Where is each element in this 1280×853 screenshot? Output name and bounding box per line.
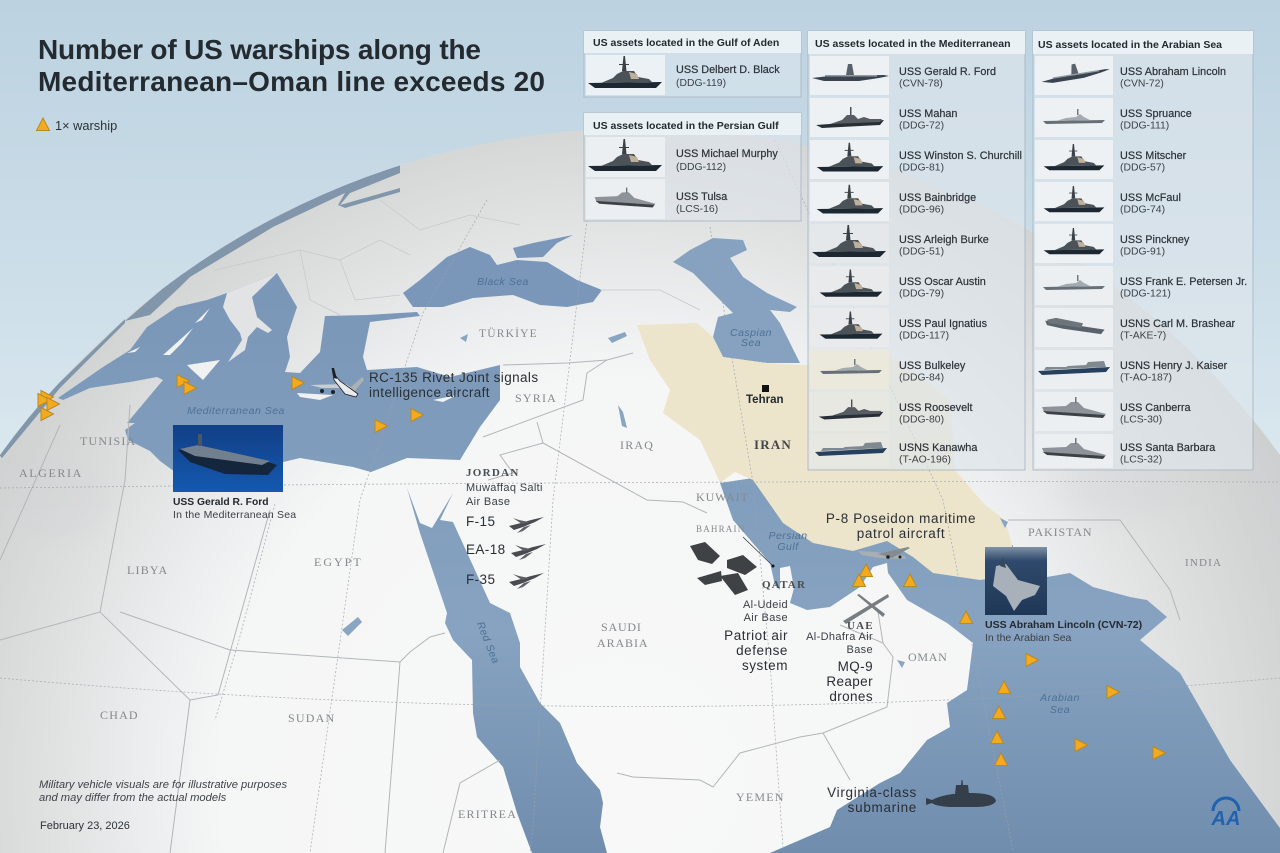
asset: USS Mitscher: (DDG-57) bbox=[1120, 162, 1165, 174]
sea: Mediterranean bbox=[58, 273, 500, 472]
country labels: SAUDI bbox=[601, 620, 642, 634]
sea labels: Mediterranean Sea bbox=[187, 405, 285, 417]
asset: USS Gerald R. Ford: USS Gerald R. Ford bbox=[899, 66, 996, 78]
asset: USS Gerald R. Ford bbox=[810, 56, 996, 95]
panel: Gulf of Aden: US assets located in the Gulf of Aden bbox=[593, 37, 779, 49]
aircraft: P-8 Poseidon: patrol aircraft bbox=[857, 526, 945, 541]
disclaimer note: and may differ from the actual models bbox=[39, 792, 227, 804]
photo: USS Gerald R. Ford: In the Mediterranean Sea bbox=[173, 509, 296, 521]
asset: USS Oscar Austin: (DDG-79) bbox=[899, 288, 944, 300]
photo: USS Gerald R. Ford bbox=[173, 425, 296, 521]
marker line: Al-Udeid bbox=[743, 537, 774, 568]
sea labels: Caspian bbox=[730, 327, 772, 339]
country borders bbox=[0, 353, 1180, 853]
country labels: ARABIA bbox=[597, 636, 648, 650]
Virginia-class submarine bbox=[827, 780, 996, 815]
Jordan base: aircraft list: JORDAN bbox=[466, 467, 520, 479]
Patriot air defense systems: system bbox=[742, 658, 788, 673]
photo: USS Abraham Lincoln: In the Arabian Sea bbox=[985, 632, 1072, 644]
country labels: IRAN bbox=[754, 437, 792, 452]
asset: USS Bulkeley: USS Bulkeley bbox=[899, 360, 966, 372]
country labels: TUNISIA bbox=[80, 434, 136, 448]
asset: USS Pinckney: (DDG-91) bbox=[1120, 246, 1165, 258]
asset: USS Michael Murphy bbox=[586, 137, 778, 177]
country labels: OMAN bbox=[908, 650, 947, 664]
sea labels: Red Sea bbox=[474, 620, 502, 666]
asset: USS Spruance: (DDG-111) bbox=[1120, 120, 1169, 132]
date: February 23, 2026 bbox=[40, 820, 130, 832]
sea labels: Sea bbox=[741, 337, 761, 349]
terrain shading bbox=[10, 460, 1180, 540]
asset: USS McFaul bbox=[1035, 182, 1181, 221]
land: Iran bbox=[637, 323, 1012, 580]
title: Mediterranean–Oman line exceeds 20 bbox=[38, 66, 545, 97]
asset: USNS Carl M. Brashear bbox=[1035, 308, 1235, 347]
asset: USS Michael Murphy: (DDG-112) bbox=[676, 162, 726, 173]
country labels: PAKISTAN bbox=[1028, 525, 1092, 539]
aircraft: RC-135 Rivet Joint bbox=[310, 368, 538, 400]
asset: USS Mitscher: USS Mitscher bbox=[1120, 150, 1187, 162]
asset: USS Delbert D. Black: USS Delbert D. Black bbox=[676, 64, 780, 76]
legend: warship marker: 1× warship bbox=[55, 118, 117, 133]
asset: USS Bainbridge: USS Bainbridge bbox=[899, 192, 976, 204]
aircraft: P-8 Poseidon bbox=[826, 511, 976, 559]
Jordan base: aircraft list: F-35 bbox=[466, 572, 495, 587]
sea: Caspian bbox=[673, 238, 800, 363]
country labels: LIBYA bbox=[127, 563, 168, 577]
asset: USS Mahan: (DDG-72) bbox=[899, 120, 944, 132]
asset: USNS Kanawha: (T-AO-196) bbox=[899, 454, 951, 466]
asset: USS Abraham Lincoln: USS Abraham Lincoln bbox=[1120, 66, 1226, 78]
country labels: SYRIA bbox=[515, 391, 557, 405]
sea: Persian Gulf and Arabian Sea bbox=[720, 478, 1280, 853]
asset: USS Abraham Lincoln: (CVN-72) bbox=[1120, 78, 1164, 90]
lakes bbox=[342, 332, 1008, 668]
asset: USS Bainbridge bbox=[810, 182, 976, 221]
Tehran: Tehran bbox=[746, 394, 784, 406]
asset: USS Mahan: USS Mahan bbox=[899, 108, 957, 120]
disclaimer note: Military vehicle visuals are for illustrative purposes bbox=[39, 779, 287, 791]
asset: USNS Kanawha bbox=[810, 434, 978, 468]
aircraft: P-8 Poseidon: P-8 Poseidon maritime bbox=[826, 511, 976, 526]
asset: USS Canberra: (LCS-30) bbox=[1120, 414, 1162, 426]
sea labels: Persian bbox=[768, 530, 808, 542]
country labels: EGYPT bbox=[314, 555, 363, 569]
asset: USS Mitscher bbox=[1035, 140, 1187, 179]
Atlantic limb and northern seas bbox=[0, 160, 400, 458]
asset: USNS Henry J. Kaiser: (T-AO-187) bbox=[1120, 372, 1172, 384]
Patriot air defense systems: Al-Udeid bbox=[743, 599, 788, 611]
photo: USS Gerald R. Ford: USS Gerald R. Ford bbox=[173, 497, 269, 508]
asset: USNS Carl M. Brashear: USNS Carl M. Brashear bbox=[1120, 318, 1235, 330]
asset: USS Paul Ignatius: USS Paul Ignatius bbox=[899, 318, 988, 330]
Jordan base: aircraft list: F-15 bbox=[466, 514, 495, 529]
country labels: ALGERIA bbox=[19, 466, 83, 480]
asset: USS Santa Barbara: (LCS-32) bbox=[1120, 454, 1162, 466]
title: Number of US warships along the bbox=[38, 34, 481, 65]
panel: Mediterranean: US assets located in the Mediterranean bbox=[815, 38, 1010, 50]
MQ-9 Reaper drones at Al-Dhafra: MQ-9 bbox=[838, 659, 873, 674]
MQ-9 Reaper drones at Al-Dhafra: Al-Dhafra Air bbox=[806, 631, 873, 643]
country labels: YEMEN bbox=[736, 790, 785, 804]
country labels: CHAD bbox=[100, 708, 139, 722]
panel: Persian Gulf: US assets located in the Persian Gulf bbox=[593, 120, 779, 132]
asset: USS Gerald R. Ford: (CVN-78) bbox=[899, 78, 943, 90]
sea labels: Black Sea bbox=[477, 276, 529, 288]
Tehran bbox=[746, 385, 784, 406]
asset: USS Abraham Lincoln bbox=[1035, 56, 1226, 95]
logo: AA bbox=[1211, 798, 1240, 830]
asset: USS Santa Barbara bbox=[1035, 434, 1216, 468]
asset: USS Frank E. Petersen Jr.: (DDG-121) bbox=[1120, 288, 1171, 300]
sea labels: Arabian bbox=[1039, 692, 1080, 704]
asset: USNS Henry J. Kaiser: USNS Henry J. Kaiser bbox=[1120, 360, 1228, 372]
aircraft: RC-135 Rivet Joint: RC-135 Rivet Joint signals bbox=[369, 370, 538, 385]
panel: Persian Gulf bbox=[584, 113, 801, 221]
asset: USS Tulsa: (LCS-16) bbox=[676, 204, 718, 215]
Patriot air defense systems bbox=[690, 542, 806, 673]
country labels: SUDAN bbox=[288, 711, 335, 725]
asset: USS Winston S. Churchill: USS Winston S. Churchill bbox=[899, 150, 1022, 162]
asset: USS Winston S. Churchill bbox=[810, 140, 1022, 179]
country labels: KUWAIT bbox=[696, 490, 749, 504]
country labels: TÜRKİYE bbox=[479, 326, 538, 340]
sea labels: Sea bbox=[1050, 704, 1070, 716]
panel: Arabian Sea: US assets located in the Arabian Sea bbox=[1038, 39, 1222, 51]
photo: USS Abraham Lincoln bbox=[985, 547, 1142, 644]
asset: USS Pinckney: USS Pinckney bbox=[1120, 234, 1190, 246]
Jordan base: aircraft list: Air Base bbox=[466, 496, 510, 508]
asset: USS Oscar Austin: USS Oscar Austin bbox=[899, 276, 986, 288]
title bbox=[38, 34, 545, 97]
panel: Mediterranean bbox=[808, 31, 1025, 470]
logo: AA: AA bbox=[1211, 808, 1240, 830]
asset: USNS Carl M. Brashear: (T-AKE-7) bbox=[1120, 330, 1166, 342]
asset: USS Frank E. Petersen Jr. bbox=[1035, 266, 1247, 305]
asset: USS Canberra: USS Canberra bbox=[1120, 402, 1191, 414]
warship markers: Gibraltar and Mediterranean bbox=[38, 374, 424, 432]
country labels: INDIA bbox=[1185, 557, 1222, 569]
sea labels bbox=[187, 276, 1080, 716]
asset: USS Roosevelt: (DDG-80) bbox=[899, 414, 944, 426]
country labels: IRAQ bbox=[620, 438, 654, 452]
sea: Black Sea and Azov bbox=[403, 235, 602, 307]
panel: Arabian Sea bbox=[1033, 31, 1253, 470]
asset: USS Bulkeley bbox=[810, 350, 966, 389]
warship markers: Hormuz and Arabian Sea bbox=[852, 564, 1166, 766]
asset: USNS Kanawha: USNS Kanawha bbox=[899, 442, 978, 454]
asset: USS Roosevelt: USS Roosevelt bbox=[899, 402, 973, 414]
country labels: BAHRAIN bbox=[696, 524, 745, 534]
MQ-9 Reaper drones at Al-Dhafra: Reaper bbox=[826, 674, 873, 689]
Patriot air defense systems: QATAR bbox=[762, 579, 806, 591]
disclaimer note bbox=[39, 779, 287, 804]
asset: USS Oscar Austin bbox=[810, 266, 986, 305]
asset: USS McFaul: USS McFaul bbox=[1120, 192, 1181, 204]
Jordan base: aircraft list: EA-18 bbox=[466, 542, 506, 557]
asset: USS Bulkeley: (DDG-84) bbox=[899, 372, 944, 384]
Virginia-class submarine: Virginia-class bbox=[827, 785, 917, 800]
asset: USS Mahan bbox=[810, 98, 957, 137]
asset: USS Spruance: USS Spruance bbox=[1120, 108, 1192, 120]
photo: USS Abraham Lincoln: USS Abraham Lincoln (CVN-72) bbox=[985, 619, 1142, 631]
asset: USS Paul Ignatius: (DDG-117) bbox=[899, 330, 949, 342]
asset: USS Bainbridge: (DDG-96) bbox=[899, 204, 944, 216]
sea labels: Gulf bbox=[777, 541, 799, 553]
Virginia-class submarine: submarine bbox=[848, 800, 917, 815]
asset: USS Delbert D. Black: (DDG-119) bbox=[676, 78, 726, 89]
land: Italy and Mediterranean islands bbox=[223, 273, 277, 362]
asset: USS Winston S. Churchill: (DDG-81) bbox=[899, 162, 944, 174]
MQ-9 Reaper drones at Al-Dhafra: UAE bbox=[847, 620, 874, 632]
asset: USS Tulsa: USS Tulsa bbox=[676, 191, 728, 203]
MQ-9 Reaper drones at Al-Dhafra: Base bbox=[847, 644, 873, 656]
Jordan base: aircraft list: Muwaffaq Salti bbox=[466, 482, 543, 494]
aircraft: RC-135 Rivet Joint: intelligence aircraft bbox=[369, 385, 490, 400]
asset: USS Santa Barbara: USS Santa Barbara bbox=[1120, 442, 1216, 454]
asset: USS Arleigh Burke: USS Arleigh Burke bbox=[899, 234, 989, 246]
asset: USS Tulsa bbox=[586, 179, 728, 219]
asset: USS Frank E. Petersen Jr.: USS Frank E. Petersen Jr. bbox=[1120, 276, 1247, 288]
country labels: ERITREA bbox=[458, 807, 517, 821]
Patriot air defense systems: defense bbox=[736, 643, 788, 658]
asset: USNS Henry J. Kaiser bbox=[1035, 350, 1228, 389]
asset: USS Canberra bbox=[1035, 392, 1191, 431]
asset: USS McFaul: (DDG-74) bbox=[1120, 204, 1165, 216]
asset: USS Paul Ignatius bbox=[810, 308, 988, 347]
asset: USS Pinckney bbox=[1035, 224, 1190, 263]
asset: USS Arleigh Burke bbox=[810, 224, 989, 263]
MQ-9 Reaper drones at Al-Dhafra: drones bbox=[829, 689, 873, 704]
country labels bbox=[19, 326, 1222, 821]
asset: USS Michael Murphy: USS Michael Murphy bbox=[676, 148, 778, 160]
asset: USS Arleigh Burke: (DDG-51) bbox=[899, 246, 944, 258]
Jordan base: aircraft list bbox=[466, 467, 546, 589]
Patriot air defense systems: Patriot air bbox=[724, 628, 788, 643]
panel: Gulf of Aden bbox=[584, 31, 801, 97]
MQ-9 Reaper drones at Al-Dhafra bbox=[806, 594, 889, 704]
asset: USS Delbert D. Black bbox=[586, 55, 780, 95]
asset: USS Roosevelt bbox=[810, 392, 973, 431]
sea: Red Sea bbox=[407, 488, 607, 853]
faint European borders bbox=[215, 200, 700, 315]
Patriot air defense systems: Air Base bbox=[744, 612, 788, 624]
asset: USS Spruance bbox=[1035, 98, 1192, 137]
